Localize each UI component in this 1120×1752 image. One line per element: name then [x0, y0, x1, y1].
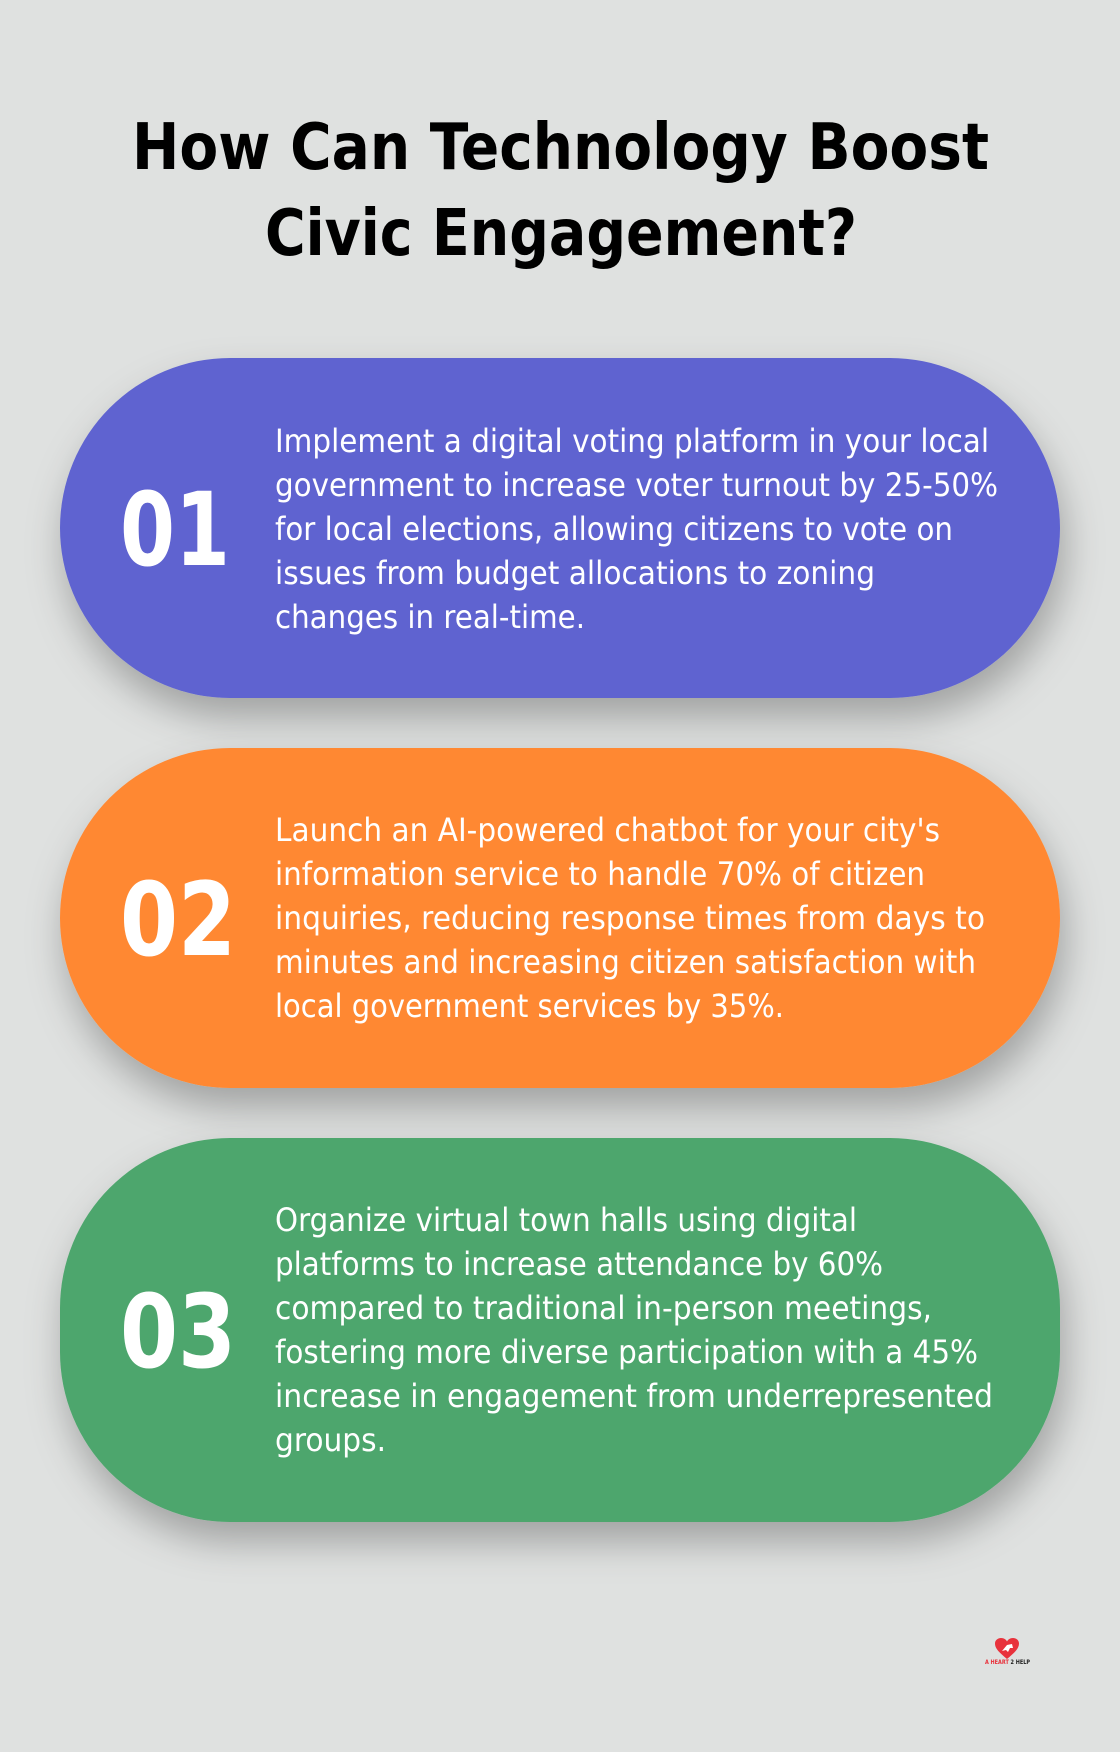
logo wordmark: A HEART 2 HELP: [985, 1658, 1030, 1666]
text block: step 03: fostering more diverse participation with a 45%: [275, 1333, 978, 1371]
pill background: green: [60, 1138, 1060, 1522]
pill background: purple: [60, 358, 1060, 698]
text block: step 02: Launch an AI-powered chatbot for your city's: [275, 811, 940, 849]
text block: step 03: groups.: [275, 1421, 386, 1459]
panel: step 01 digital voting: [60, 358, 1060, 698]
text block: step 01: changes in real-time.: [275, 598, 585, 636]
panel: step 02 AI chatbot: [60, 748, 1060, 1088]
text block: step 03: [275, 1201, 993, 1459]
text block: step 02: inquiries, reducing response times from days to: [275, 899, 985, 937]
text block: step 02: minutes and increasing citizen satisfaction with: [275, 943, 976, 981]
text block: step 01: [275, 422, 998, 636]
text block: step 02: [275, 811, 985, 1025]
pill background: orange: [60, 748, 1060, 1088]
text block: step 03: platforms to increase attendance by 60%: [275, 1245, 883, 1283]
text block: step 03: increase in engagement from underrepresented: [275, 1377, 993, 1415]
number 01: 01: [120, 471, 230, 590]
title: Civic Engagement?: [265, 197, 857, 271]
text block: step 01: for local elections, allowing citizens to vote on: [275, 510, 953, 548]
text block: step 02: information service to handle 70% of citizen: [275, 855, 925, 893]
text block: step 03: compared to traditional in-person meetings,: [275, 1289, 932, 1327]
title: [132, 111, 989, 271]
text block: step 01: Implement a digital voting platform in your local: [275, 422, 989, 460]
text block: step 01: government to increase voter turnout by 25-50%: [275, 466, 998, 504]
logo: A Heart 2 Help: [985, 1638, 1030, 1666]
title: How Can Technology Boost: [132, 111, 989, 185]
text block: step 02: local government services by 35%.: [275, 987, 784, 1025]
text block: step 03: Organize virtual town halls using digital: [275, 1201, 857, 1239]
icon: red heart with hands: [995, 1638, 1019, 1659]
number 03: 03: [120, 1273, 236, 1392]
panel: step 03 virtual town halls: [60, 1138, 1060, 1522]
number 02: 02: [120, 861, 236, 980]
text block: step 01: issues from budget allocations to zoning: [275, 554, 875, 592]
